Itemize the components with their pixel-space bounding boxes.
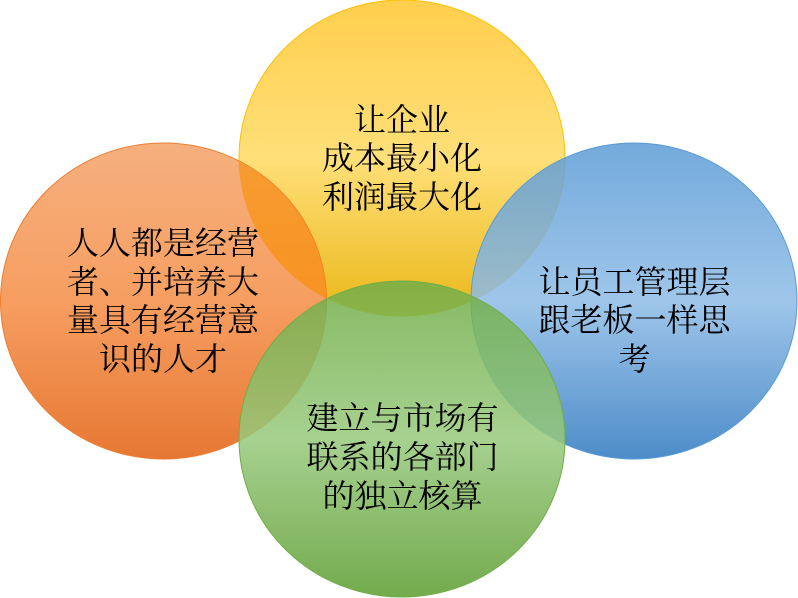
text: bottom circle: 的独立核算 [322, 478, 483, 514]
text: top circle: 让企业 [354, 102, 450, 138]
text: left circle: 量具有经营意 [67, 302, 259, 338]
text: right circle: 跟老板一样思 [538, 302, 731, 338]
text: top circle [322, 102, 482, 215]
text: right circle: 让员工管理层 [538, 264, 731, 300]
text: bottom circle: 联系的各部门 [306, 439, 499, 475]
text: right circle: 考 [618, 341, 651, 377]
text: left circle: 识的人才 [99, 341, 227, 377]
overlap: orange and yellow [239, 161, 326, 298]
text: bottom circle [306, 400, 499, 514]
text: left circle: 者、并培养大 [67, 264, 259, 300]
text: top circle: 利润最大化 [322, 179, 482, 215]
circle: yellow [239, 0, 565, 316]
text: bottom circle: 建立与市场有 [306, 400, 499, 436]
text: left circle: 人人都是经营 [67, 225, 259, 261]
circle: green [239, 281, 565, 597]
circle: orange [0, 143, 326, 459]
circle: blue [471, 143, 797, 459]
text: right circle [538, 264, 731, 377]
text: top circle: 成本最小化 [322, 140, 482, 176]
text: left circle [67, 225, 259, 377]
